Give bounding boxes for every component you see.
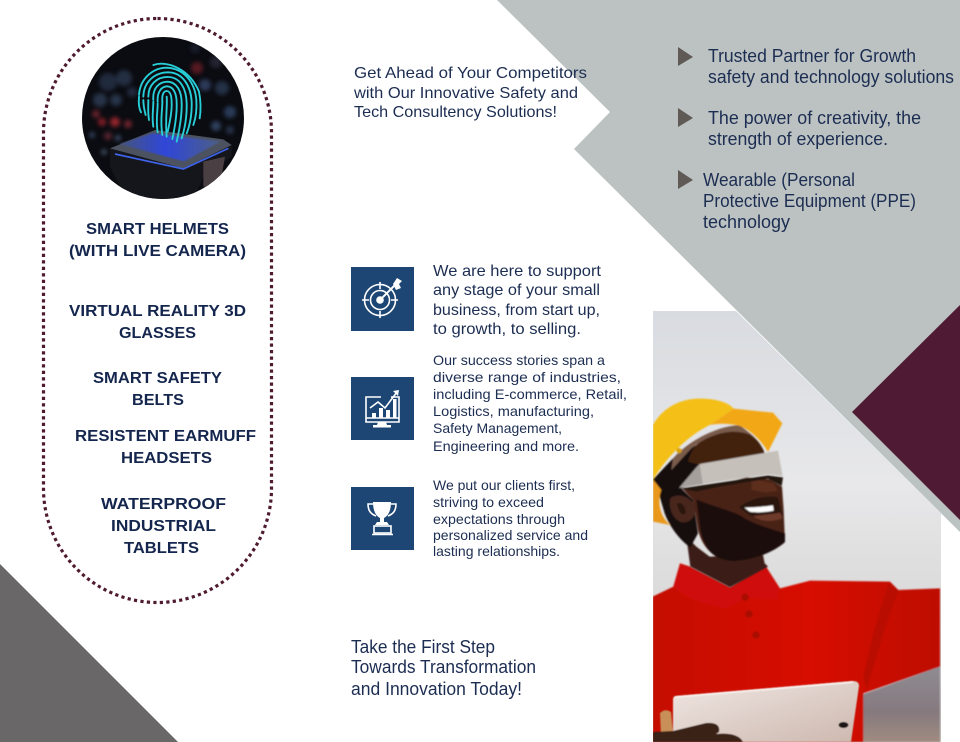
closing call to action: Take the First Step <box>351 637 495 657</box>
grey background shape <box>497 0 960 532</box>
item: smart safety belts <box>93 370 222 409</box>
item: waterproof tablets: WATERPROOF <box>101 496 226 513</box>
maroon diamond <box>852 305 960 520</box>
item: waterproof tablets: TABLETS <box>124 540 199 557</box>
text: support any stage: to growth, to selling. <box>433 321 581 338</box>
bullet: trusted partner: Trusted Partner for Growth <box>708 46 916 66</box>
item: virtual reality glasses: VIRTUAL REALITY 3D <box>69 303 246 320</box>
item: smart helmets: SMART HELMETS <box>86 221 229 238</box>
left panel product list <box>69 221 256 557</box>
item: virtual reality glasses: GLASSES <box>119 325 196 342</box>
item: earmuff headsets: HEADSETS <box>121 450 212 467</box>
text: support any stage: We are here to support <box>433 263 602 280</box>
bullet list on grey shape <box>678 46 954 232</box>
text: support any stage <box>433 263 602 338</box>
bullet: creativity and experience <box>678 108 921 149</box>
fingerprint <box>139 64 201 142</box>
item: smart helmets: (WITH LIVE CAMERA) <box>69 243 246 260</box>
text: success stories: including E-commerce, Retail, <box>433 386 627 402</box>
dotted rounded panel outline <box>44 18 272 602</box>
text: success stories <box>433 352 627 454</box>
item: smart helmets <box>69 221 246 260</box>
icon: trophy <box>351 487 414 550</box>
item: waterproof tablets <box>101 496 226 557</box>
text: clients first: personalized service and <box>433 527 588 543</box>
head and helmet <box>653 399 785 587</box>
bullet: wearable technology: Wearable (Personal <box>703 170 855 190</box>
intro text: Tech Consultency Solutions! <box>354 104 557 121</box>
text: success stories: Our success stories span a <box>433 352 605 368</box>
text: support any stage: business, from start up, <box>433 302 600 319</box>
intro text <box>353 65 587 121</box>
text: clients first: expectations through <box>433 511 565 527</box>
icon: growth chart on monitor <box>351 377 414 440</box>
text: success stories: diverse range of industries, <box>433 369 621 385</box>
closing call to action <box>351 637 536 699</box>
bullet: trusted partner: safety and technology solutions <box>708 67 954 87</box>
bullet: wearable technology: technology <box>703 212 790 232</box>
microchip <box>110 130 232 200</box>
closing call to action: and Innovation Today! <box>351 679 522 699</box>
intro text: Get Ahead of Your Competitors <box>354 65 587 82</box>
text: success stories: Logistics, manufacturing, <box>433 403 594 419</box>
closing call to action: Towards Transformation <box>351 657 536 677</box>
icon: target with arrow <box>351 267 414 331</box>
item: earmuff headsets <box>75 428 256 467</box>
text: clients first <box>433 477 588 559</box>
bullet: wearable technology: Protective Equipment (PPE) <box>703 191 916 211</box>
bullet: creativity and experience: The power of creativity, the <box>708 108 921 128</box>
text: success stories: Safety Management, <box>433 420 562 436</box>
item: virtual reality glasses <box>69 303 246 342</box>
item: smart safety belts: BELTS <box>132 392 184 409</box>
bullet: wearable technology <box>678 170 916 232</box>
bokeh circuit lights <box>87 42 238 157</box>
circular image: fingerprint over microchip <box>82 37 244 200</box>
tablet and hand <box>653 681 859 742</box>
shirt and background <box>653 563 940 742</box>
text: clients first: striving to exceed <box>433 494 544 510</box>
item: waterproof tablets: INDUSTRIAL <box>111 518 216 535</box>
photo: worker with helmet, visor and tablet <box>653 311 941 742</box>
bullet: trusted partner <box>678 46 954 87</box>
text: clients first: We put our clients first, <box>433 477 575 493</box>
text: support any stage: any stage of your small <box>433 282 600 299</box>
item: smart safety belts: SMART SAFETY <box>93 370 222 387</box>
text: clients first: lasting relationships. <box>433 543 560 559</box>
dark grey corner triangle <box>0 564 178 742</box>
bullet: creativity and experience: strength of experience. <box>708 129 888 149</box>
intro text: with Our Innovative Safety and <box>353 85 578 102</box>
text: success stories: Engineering and more. <box>433 438 579 454</box>
item: earmuff headsets: RESISTENT EARMUFF <box>75 428 256 445</box>
